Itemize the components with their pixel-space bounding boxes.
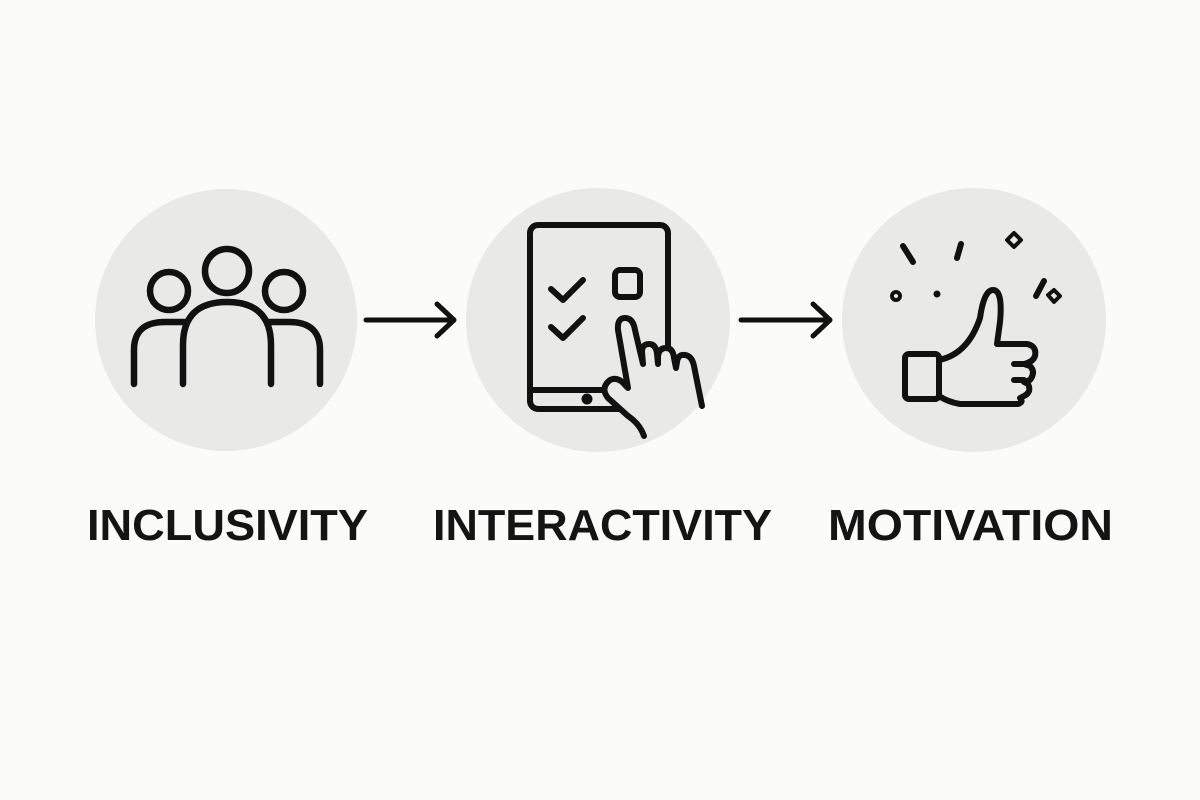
circle: interactivity background	[466, 188, 730, 452]
panel: interactivity	[466, 188, 730, 452]
circle: inclusivity background	[95, 189, 357, 451]
label: motivation: MOTIVATION	[828, 501, 1113, 550]
icon: tablet with checklist and tapping hand	[530, 225, 702, 436]
icon: thumbs up with sparkles	[892, 233, 1060, 404]
panel: motivation	[842, 188, 1106, 452]
panel: inclusivity	[95, 189, 357, 451]
label: interactivity: INTERACTIVITY	[433, 501, 772, 550]
arrow: interactivity to motivation	[741, 304, 830, 336]
label: inclusivity: INCLUSIVITY	[87, 501, 368, 550]
icon: group of people	[134, 249, 320, 384]
arrow: inclusivity to interactivity	[366, 304, 454, 336]
circle: motivation background	[842, 188, 1106, 452]
